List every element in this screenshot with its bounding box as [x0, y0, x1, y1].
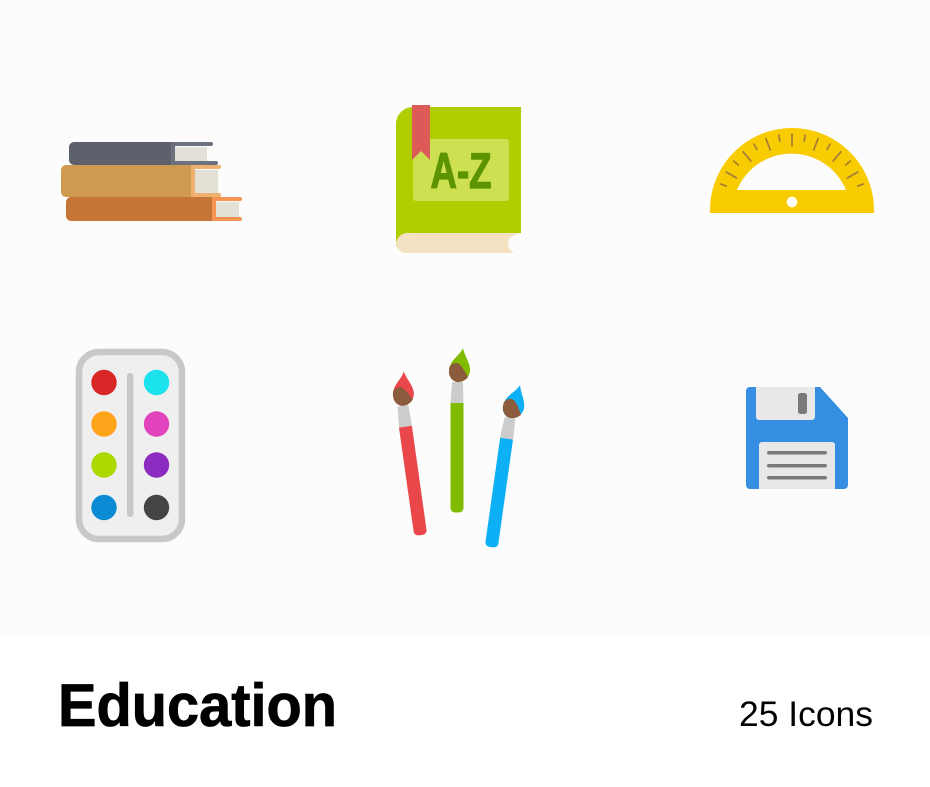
icon: red brush	[390, 370, 434, 536]
icon: green brush	[449, 348, 470, 512]
icon count: 25 Icons	[739, 695, 873, 734]
icon: yellow protractor	[710, 128, 874, 213]
icon: A-Z dictionary book	[396, 105, 521, 253]
icon: blue brush	[483, 383, 527, 549]
icon: red bookmark	[412, 105, 430, 160]
title: Education	[58, 672, 337, 739]
icon: watercolor paint palette	[79, 352, 182, 539]
icon: stack of books	[61, 142, 242, 221]
text: A-Z: A-Z	[430, 143, 492, 199]
icon: three paint brushes	[390, 348, 527, 549]
icon: floppy disk	[746, 387, 848, 489]
